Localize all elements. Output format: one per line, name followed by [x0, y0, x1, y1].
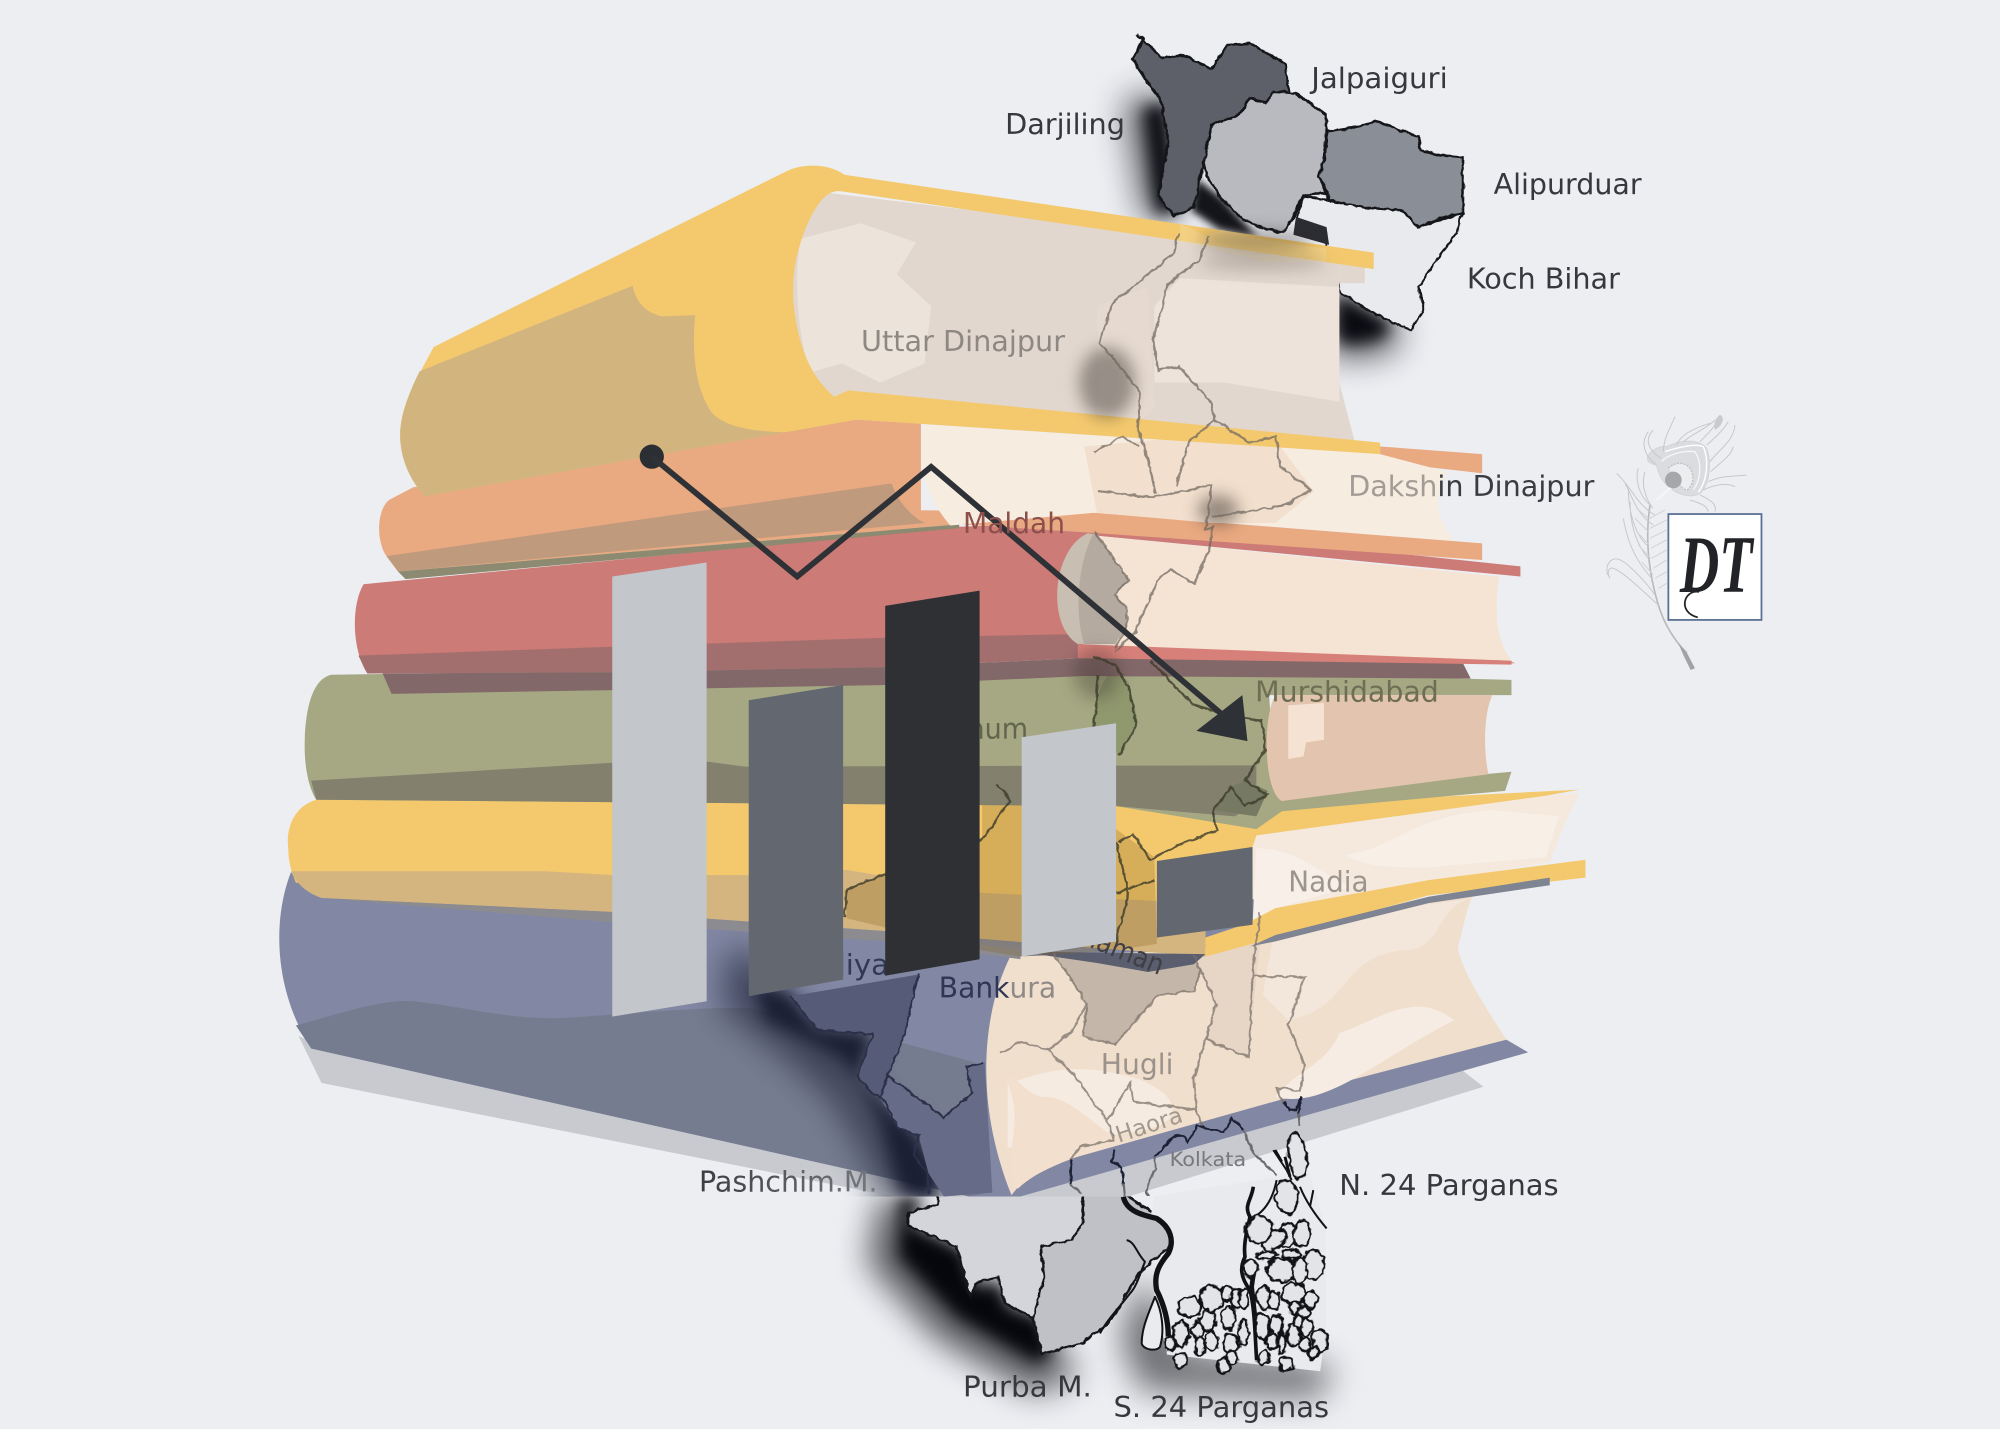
- bar 2: [749, 685, 843, 996]
- map shadow: south coast: [867, 1196, 1333, 1398]
- label: Alipurduar: Alipurduar: [1494, 168, 1642, 201]
- label: Koch Bihar: Koch Bihar: [1467, 262, 1620, 295]
- bar 3: [885, 591, 980, 976]
- pages: top book: [790, 191, 1365, 441]
- map soft shadow through pages: [1074, 230, 1327, 699]
- district lines on grey shadow band: [1070, 1114, 1300, 1196]
- delta channels: [1100, 1133, 1328, 1373]
- map shadow on navy book: [721, 950, 938, 1205]
- declining trend line with arrow: [640, 445, 1247, 741]
- district: Jalpaiguri: [1204, 92, 1327, 232]
- label: Dakshin Dinajpur: Dakshin Dinajpur: [1348, 470, 1595, 503]
- district labels hidden behind chart: [772, 713, 1169, 982]
- monogram letters: DT: [1679, 519, 1755, 610]
- infographic canvas: [279, 34, 1762, 1423]
- darker district tint on yellow: [844, 781, 1157, 957]
- label: Pashchim Medinipur: Pashchim.M.: [699, 1165, 878, 1198]
- district: Darjiling: [1133, 34, 1288, 216]
- label: Kolkata: Kolkata: [1170, 1148, 1246, 1171]
- label: Birbhum: Birbhum: [913, 713, 1028, 746]
- district lines on navy strip: [1070, 1097, 1301, 1184]
- district lines on upper books: [1094, 233, 1311, 652]
- label: Puruliya: Puruliya: [772, 949, 889, 982]
- district: Alipurduar: [1319, 121, 1463, 227]
- map shadow: north: [1122, 89, 1403, 360]
- district: Koch Bihar: [1296, 196, 1462, 330]
- map: South 24 Parganas delta and river: [1100, 1133, 1328, 1373]
- river Hugli: [1123, 1197, 1171, 1337]
- monogram flourish: [1685, 592, 1699, 617]
- icon: peacock feather: [1607, 415, 1747, 670]
- pages: orange book: [921, 425, 1454, 541]
- Sagar island: [1142, 1297, 1162, 1350]
- label: Uttar Dinajpur: Uttar Dinajpur: [861, 325, 1066, 358]
- label: North 24 Parganas: N. 24 Parganas: [1339, 1169, 1559, 1202]
- label: Haora: Haora: [1112, 1103, 1186, 1149]
- district lines on navy book: [791, 975, 985, 1194]
- eastern thick channel: [1242, 1187, 1257, 1360]
- book: green: [305, 663, 1511, 829]
- book shadow: [298, 1036, 1483, 1196]
- label: Purba Medinipur: Purba M.: [963, 1371, 1092, 1404]
- monogram box: [1668, 514, 1761, 620]
- label: Maldah: Maldah: [963, 507, 1065, 540]
- district lines on lower pages: [1000, 912, 1305, 1159]
- cover: top book: [400, 166, 1380, 496]
- delta land tint: [1151, 1154, 1327, 1371]
- label: South 24 Parganas: S. 24 Parganas: [1114, 1391, 1329, 1424]
- book: yellow top: [400, 166, 1380, 496]
- label: Bardhaman: Bardhaman: [1024, 898, 1169, 982]
- district lines on green and yellow books: [844, 657, 1268, 941]
- district labels: [699, 62, 1642, 1424]
- map: north districts and coast underlay: [867, 34, 1463, 1398]
- map: district boundaries seen through the books: [844, 230, 1327, 1196]
- bar chart: [612, 563, 1253, 1017]
- pages: red book: [1084, 536, 1511, 661]
- bar 4: [1022, 723, 1116, 957]
- book: red: [355, 522, 1520, 694]
- label: Hugli: Hugli: [1101, 1048, 1173, 1081]
- book: navy bottom: [279, 872, 1528, 1205]
- delta islands: [1165, 1133, 1328, 1373]
- arrowhead: [1196, 695, 1247, 741]
- book: yellow: [288, 781, 1585, 972]
- bar 5: [1157, 847, 1253, 938]
- bar 1: [612, 563, 707, 1017]
- logo: feather and DT monogram: [1607, 415, 1761, 670]
- book stack illustration: [279, 166, 1585, 1205]
- label: Bankura: Bankura: [939, 971, 1056, 1004]
- book: orange: [379, 420, 1482, 579]
- label: Darjiling: Darjiling: [1005, 108, 1125, 141]
- label: Jalpaiguri: Jalpaiguri: [1309, 62, 1448, 95]
- label: Murshidabad: Murshidabad: [1255, 676, 1439, 709]
- label: Nadia: Nadia: [1288, 866, 1369, 899]
- pages: bottom book: [986, 893, 1506, 1195]
- district: Purba Medinipur: [908, 1194, 1172, 1353]
